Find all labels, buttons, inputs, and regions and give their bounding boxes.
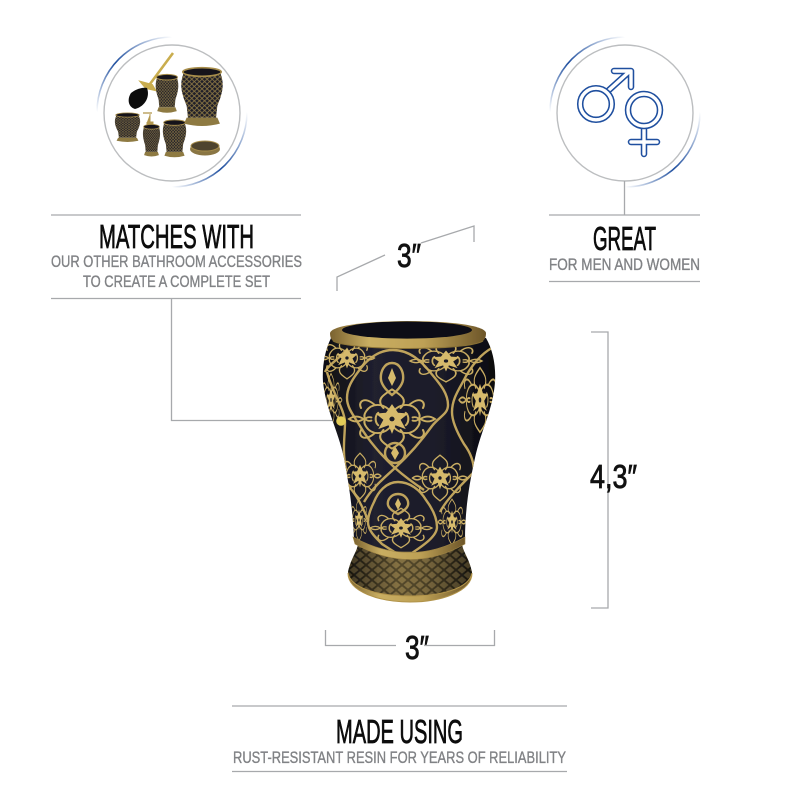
accent arc lower right xyxy=(625,112,700,187)
panel: matches with icon xyxy=(97,37,247,187)
callout dot xyxy=(336,416,346,426)
soap dispenser thumbnail xyxy=(143,113,160,156)
vase base xyxy=(348,544,472,602)
tumbler thumbnail xyxy=(156,74,178,113)
icon: female symbol xyxy=(628,94,660,154)
wastebasket thumbnail xyxy=(181,68,223,126)
main floral motif xyxy=(349,389,435,449)
panel: made using text xyxy=(232,706,567,772)
lower centre floral motif xyxy=(370,508,432,548)
panel: gender icon xyxy=(550,37,700,187)
dimension: base width: 3″ xyxy=(405,629,429,666)
accent arc upper left xyxy=(550,37,625,112)
left floral motif xyxy=(323,372,342,422)
gold band xyxy=(353,537,465,560)
accent arc upper left xyxy=(97,37,172,112)
upper right floral motif xyxy=(408,347,484,383)
inner teardrop leaves xyxy=(388,368,401,510)
heading: made using: MADE USING xyxy=(336,713,463,750)
lower left floral motif xyxy=(339,453,381,499)
toilet brush xyxy=(129,53,173,109)
accent arc lower right xyxy=(172,112,247,187)
dimension: height: 4,3″ xyxy=(590,458,637,495)
connector: matches with to product xyxy=(172,298,335,420)
heading: matches with: MATCHES WITH xyxy=(99,218,254,255)
lower right floral motif xyxy=(412,455,468,501)
heading: great: GREAT xyxy=(593,220,656,257)
dimension: top width: 3″ xyxy=(397,237,421,274)
cup thumbnail xyxy=(115,113,140,142)
soap dish thumbnail xyxy=(190,141,220,156)
product set thumbnail xyxy=(115,53,223,157)
text: accessories line 2: TO CREATE A COMPLETE SET xyxy=(83,273,270,291)
upper left floral motif xyxy=(324,344,376,380)
text: rust-resistant resin: RUST-RESISTANT RESIN FOR YEARS OF RELIABILITY xyxy=(233,749,566,767)
toothbrush holder thumbnail xyxy=(163,120,186,157)
dimension: height xyxy=(590,332,637,608)
vase rim xyxy=(330,321,486,348)
connector: gender ring to heading xyxy=(624,181,626,215)
dimension: top width xyxy=(337,226,474,291)
icon: male symbol xyxy=(580,71,631,120)
text: for men and women: FOR MEN AND WOMEN xyxy=(549,256,700,274)
lower edge motifs xyxy=(349,499,369,541)
product photo: vase xyxy=(320,321,501,602)
vase body xyxy=(320,337,501,558)
panel: great text xyxy=(549,215,700,282)
panel: matches with text xyxy=(51,215,302,298)
text: accessories line 1: OUR OTHER BATHROOM ACCESSORIES xyxy=(51,253,302,271)
icon ring: gender xyxy=(557,45,693,181)
ornament panels xyxy=(325,345,500,553)
icon ring: matches with xyxy=(104,45,240,181)
right floral motif xyxy=(459,368,501,432)
dimension: base width xyxy=(326,629,494,666)
